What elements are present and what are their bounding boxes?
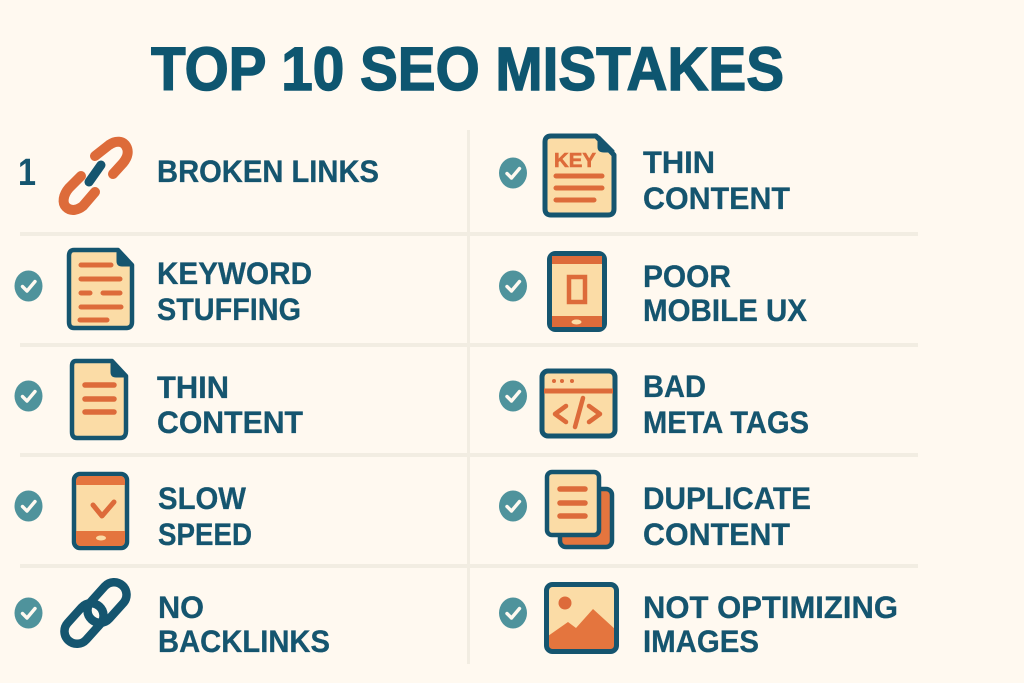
label [157,255,312,327]
label [643,480,811,552]
label [643,368,809,440]
row: thin content left [14,361,303,440]
row: thin content right [499,136,790,216]
check badge [499,270,527,302]
label [157,369,303,440]
label: CONTENT [643,180,790,216]
label: DUPLICATE [643,480,811,516]
label [643,258,807,328]
label: BAD [643,368,706,404]
label: THIN [157,369,229,405]
row: not optimizing images [499,584,898,659]
icon: document [72,361,126,438]
icon: document with text lines [69,250,132,328]
label [643,589,898,659]
check badge [14,270,42,302]
row: duplicate content [499,472,811,552]
row: bad meta tags [499,368,809,440]
label: MOBILE UX [643,292,807,328]
check badge [499,490,527,522]
label: META TAGS [643,404,809,440]
label: NOT OPTIMIZING [643,589,898,625]
check badge [499,380,527,412]
label: CONTENT [643,516,790,552]
label: NO [158,589,204,625]
label [158,589,330,659]
title: TOP 10 SEO MISTAKES [151,35,784,103]
label: IMAGES [643,623,759,659]
icon: key document [545,136,614,215]
row: keyword stuffing [14,250,312,328]
icon: stacked documents [547,472,612,547]
label: POOR [643,258,731,294]
label: CONTENT [157,404,303,440]
label: KEYWORD [157,255,312,291]
label [643,144,790,216]
label [158,480,252,552]
check badge [499,158,527,188]
row: poor mobile ux [499,254,807,330]
icon: key document: KEY [554,150,597,172]
label: BACKLINKS [158,623,330,659]
row: slow speed [14,474,252,552]
icon: phone with check [74,474,127,548]
icon: code window [542,371,615,436]
icon: chain link [59,577,132,649]
row: broken links [18,142,379,210]
check badge [14,598,42,628]
check badge [14,490,42,522]
label: SLOW [158,480,246,516]
label: STUFFING [157,291,301,327]
label: BROKEN LINKS [157,153,379,189]
number 1: 1 [18,152,36,194]
label: SPEED [158,516,252,552]
icon: image placeholder [546,584,616,652]
row: no backlinks [14,577,330,659]
check badge [499,598,527,628]
icon: broken chain link [64,142,128,210]
label: THIN [643,144,715,180]
check badge [14,380,42,412]
icon: tablet [550,254,604,330]
